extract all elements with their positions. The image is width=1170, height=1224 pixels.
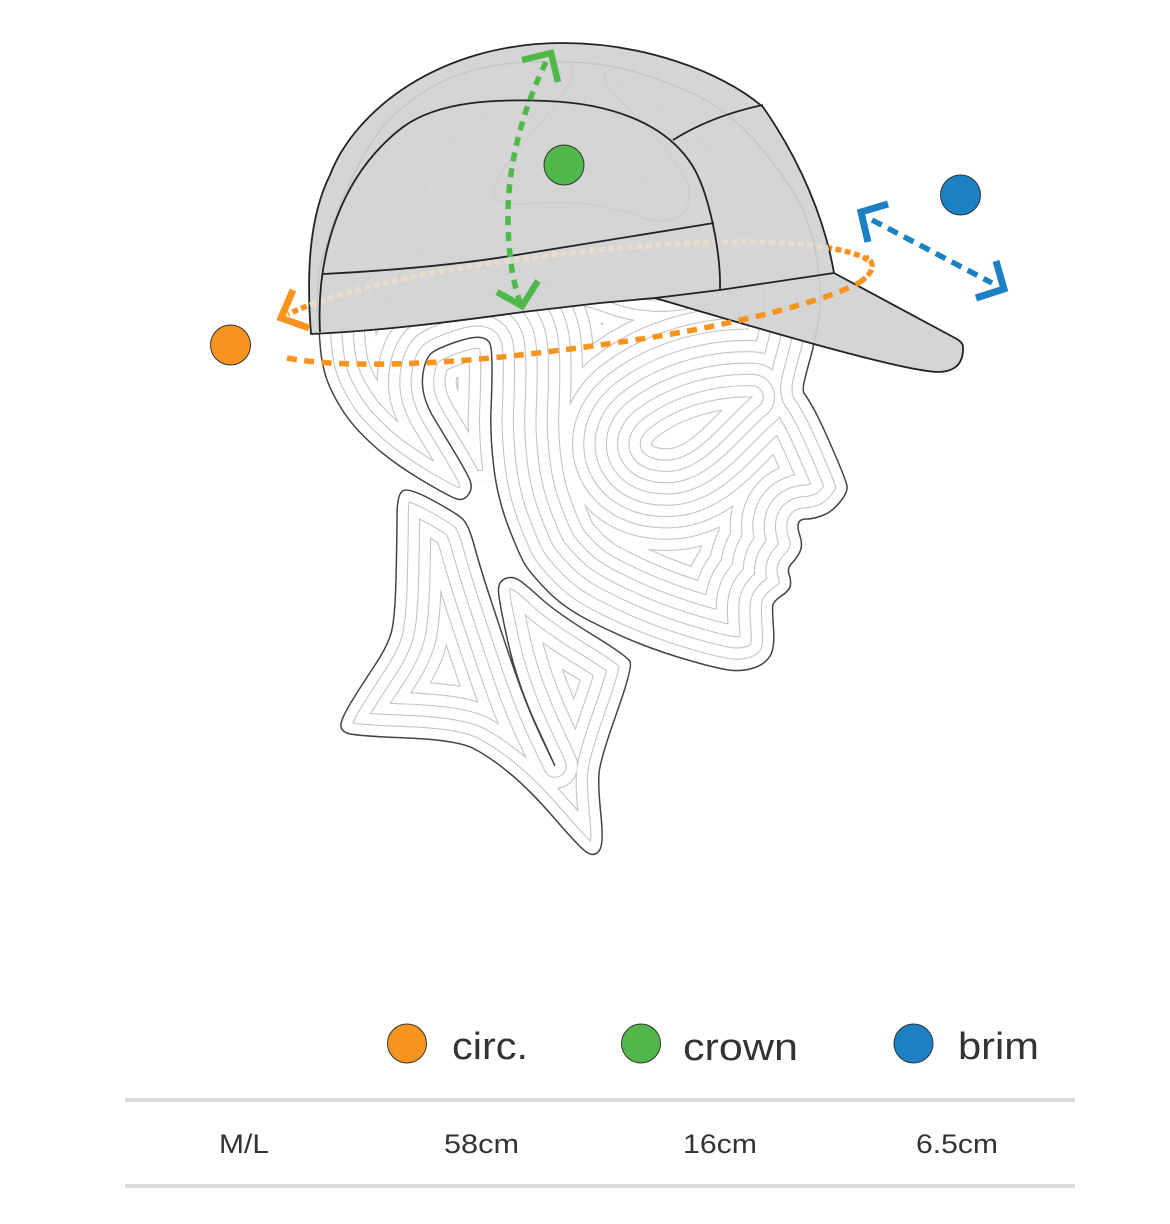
brim value: 6.5cm	[916, 1129, 998, 1159]
orange marker dot	[210, 325, 250, 365]
cap crown panel seam	[320, 100, 720, 332]
size label: M/L	[219, 1129, 269, 1159]
legend: circ	[388, 1024, 528, 1068]
green marker dot	[544, 145, 584, 185]
legend: brim: brim	[958, 1026, 1039, 1068]
size table	[125, 1098, 1075, 1188]
cap bottom edge seam	[655, 273, 834, 298]
cap front panel seam	[673, 105, 763, 140]
orange circumference arrow: back section	[288, 242, 868, 314]
legend: circ: circ.	[452, 1026, 528, 1068]
cap band seam	[323, 223, 714, 274]
legend: brim	[894, 1024, 1039, 1068]
cap	[288, 43, 963, 372]
legend: crown: crown	[683, 1027, 798, 1069]
orange circumference arrow: front section	[281, 257, 872, 364]
crown value: 16cm	[683, 1129, 757, 1159]
circumference value: 58cm	[444, 1129, 519, 1159]
blue marker dot	[940, 175, 980, 215]
legend: crown	[622, 1024, 798, 1069]
green crown arrow	[497, 53, 558, 306]
cap body and brim fill	[309, 43, 963, 372]
neck contour illustration	[341, 490, 630, 854]
blue brim arrow	[861, 204, 1004, 298]
faded circumference dashes seen through cap	[309, 239, 830, 308]
head contour illustration	[318, 62, 847, 671]
legend	[388, 1024, 1039, 1069]
